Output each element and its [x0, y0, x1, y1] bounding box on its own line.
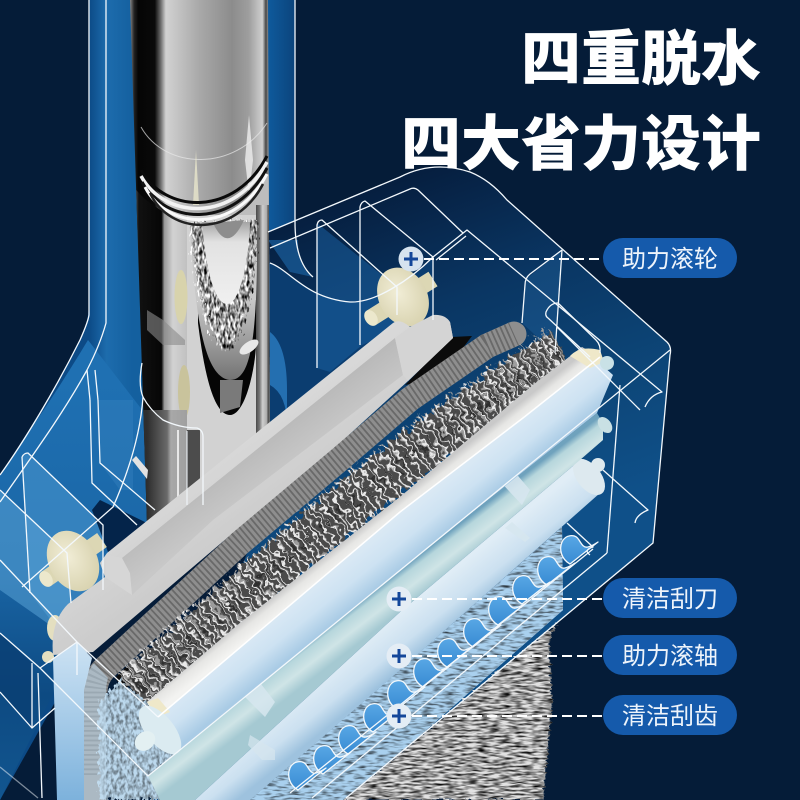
roller 2 — [148, 413, 615, 800]
callout: 助力滚轮: 助力滚轮 — [622, 246, 718, 273]
cream knob: lower — [36, 521, 110, 663]
cleaning teeth — [289, 536, 598, 790]
callout: 清洁刮刀 — [386, 578, 737, 618]
heading — [401, 26, 761, 178]
callout: 助力滚轴: 助力滚轴 — [622, 643, 718, 670]
pipe: lower section below collar — [130, 172, 270, 530]
bracket: recessed channel — [122, 338, 403, 595]
clear front strip and tinted hose — [53, 642, 108, 800]
callout: 清洁刮齿 — [386, 695, 737, 735]
pipe: collar rings — [141, 115, 267, 225]
small white strut — [132, 456, 148, 479]
heading: 四重脱水 — [521, 26, 761, 93]
left blue-tint fur — [98, 680, 175, 800]
callout: 助力滚轮 — [398, 238, 737, 278]
gap shadow — [405, 336, 472, 385]
blue mop pad — [250, 527, 563, 800]
chrome handle pipe — [130, 0, 270, 535]
callout: 助力滚轴 — [386, 635, 737, 675]
heading: 四大省力设计 — [401, 111, 761, 178]
pipe: reflections — [140, 205, 270, 535]
hose gap dark — [115, 660, 142, 692]
roller 1 — [131, 347, 614, 761]
grey mop pad — [343, 623, 557, 800]
mop fur — [133, 350, 563, 692]
callout: 清洁刮刀: 清洁刮刀 — [622, 586, 718, 613]
callout: 清洁刮齿: 清洁刮齿 — [622, 703, 718, 730]
cream knob: upper — [361, 258, 439, 336]
ribbed hose — [82, 322, 526, 800]
grey bracket — [53, 315, 453, 655]
roller 3 — [195, 453, 611, 800]
